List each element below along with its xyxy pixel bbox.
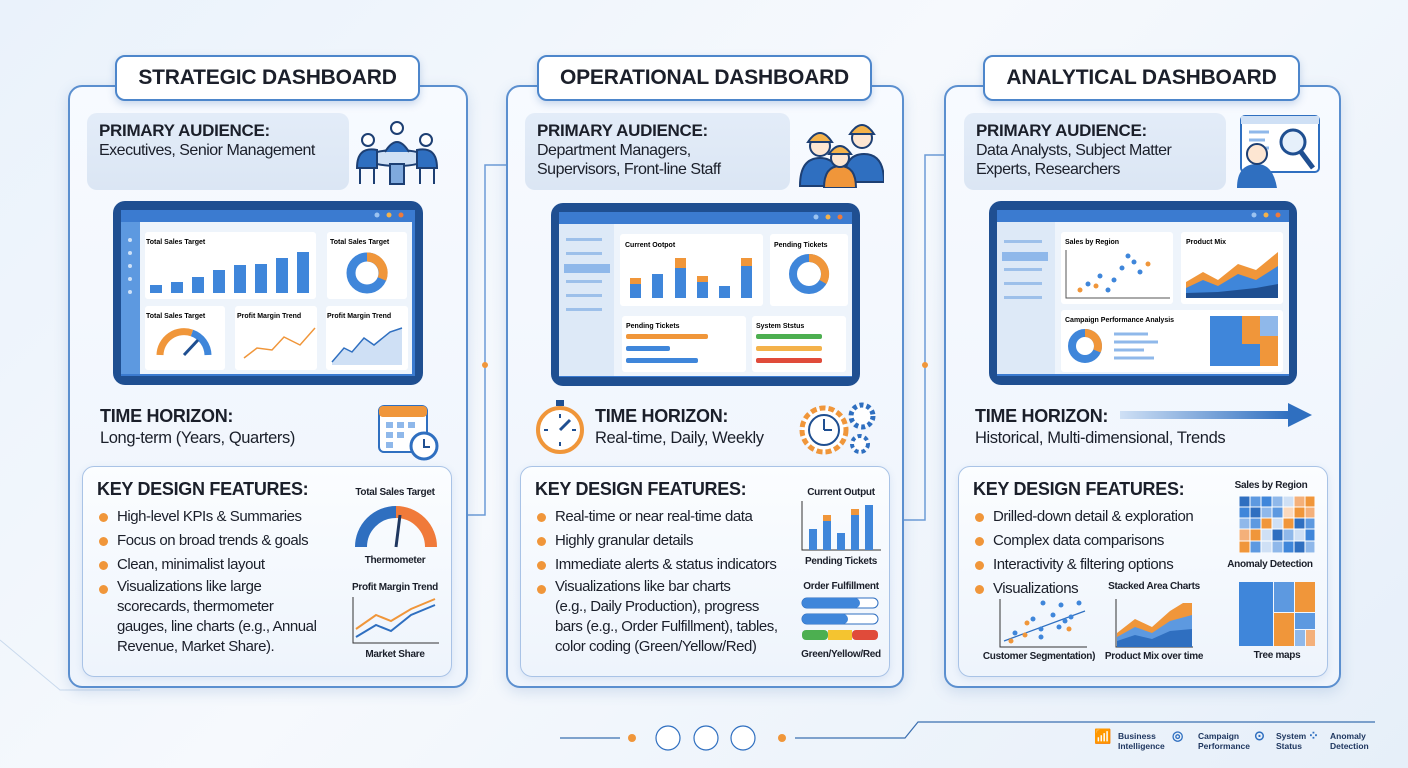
key features: operational: Highly granular details — [555, 532, 693, 549]
legend: Anomaly — [1330, 731, 1366, 741]
key features: operational: bars (e.g., Order Fulfillment), tables, — [555, 618, 778, 635]
screen: operational: Pending Tickets — [774, 242, 828, 249]
mini gauge: Total Sales Target — [355, 487, 435, 498]
audience: analytical — [964, 113, 1226, 190]
screen: strategic: Total Sales Target — [330, 239, 390, 246]
screen: analytical: Product Mix — [1186, 239, 1226, 246]
time horizon: strategic: Long-term (Years, Quarters) — [100, 429, 295, 447]
key features: strategic: Revenue, Market Share). — [117, 638, 274, 655]
audience: strategic: PRIMARY AUDIENCE: — [99, 121, 270, 140]
key features: strategic: gauges, line charts (e.g., Annual — [117, 618, 316, 635]
footer: icons and line — [560, 721, 1375, 751]
screen: strategic — [113, 201, 423, 385]
key features: strategic: High-level KPIs & Summaries — [117, 508, 302, 525]
time horizon: operational: Real-time, Daily, Weekly — [595, 429, 764, 447]
arrow: timeline — [1120, 403, 1312, 427]
time horizon: analytical: Historical, Multi-dimensional, Trends — [975, 429, 1225, 447]
time horizon: operational: TIME HORIZON: — [595, 406, 728, 426]
scatter — [1000, 599, 1087, 648]
panel: strategic — [68, 85, 468, 688]
legend: ⁘ — [1308, 728, 1319, 743]
key features: operational — [520, 466, 890, 677]
key features: strategic: Visualizations like large — [117, 578, 261, 595]
key features: analytical: Visualizations — [993, 580, 1078, 597]
screen: analytical: Campaign Performance Analysis — [1065, 317, 1174, 324]
key features: analytical: Product Mix over time — [1105, 651, 1203, 662]
legend: ◎ — [1172, 728, 1183, 743]
legend — [1094, 728, 1369, 751]
key features: analytical: Anomaly Detection — [1227, 559, 1313, 570]
key features: analytical: Complex data comparisons — [993, 532, 1164, 549]
key features: analytical: Stacked Area Charts — [1108, 581, 1200, 592]
audience: analytical: Experts, Researchers — [976, 161, 1120, 178]
panel: operational — [506, 85, 904, 688]
legend: System — [1276, 731, 1306, 741]
key features: operational: Visualizations like bar charts — [555, 578, 730, 595]
key features: strategic: Clean, minimalist layout — [117, 556, 265, 573]
tab: strategic dashboard — [115, 55, 420, 101]
key features: operational: color coding (Green/Yellow/Red) — [555, 638, 756, 655]
icon: workers — [799, 124, 884, 188]
key features: analytical: Sales by Region — [1235, 480, 1307, 491]
key features: strategic: Focus on broad trends & goals — [117, 532, 308, 549]
icon: stopwatch — [536, 400, 584, 454]
audience: analytical: Data Analysts, Subject Matter — [976, 142, 1171, 159]
tab: operational dashboard — [537, 55, 872, 101]
time horizon: operational — [595, 406, 764, 447]
screen: strategic: Profit Margin Trend — [327, 313, 391, 320]
key features: analytical: Drilled-down detail & exploration — [993, 508, 1193, 525]
screen: operational: Current Ootpot — [625, 242, 676, 249]
icon: meeting — [356, 121, 438, 185]
key features: strategic: Thermometer — [365, 555, 425, 566]
screen: strategic: Profit Margin Trend — [237, 313, 301, 320]
audience: operational: Department Managers, — [537, 142, 691, 159]
key features: strategic: Profit Margin Trend — [352, 582, 438, 593]
key features: analytical: KEY DESIGN FEATURES: — [973, 479, 1184, 499]
key features: analytical: Customer Segmentation) — [983, 651, 1095, 662]
key features: analytical — [958, 466, 1328, 677]
legend: 📶 — [1094, 728, 1111, 744]
time horizon: analytical — [975, 406, 1225, 447]
legend: Performance — [1198, 741, 1250, 751]
key features: strategic: Market Share — [365, 649, 425, 660]
icon: analyst — [1237, 115, 1320, 188]
icon: calendar — [378, 405, 438, 460]
key features: operational: (e.g., Daily Production), progress — [555, 598, 759, 615]
key features: operational: Immediate alerts & status indicators — [555, 556, 776, 573]
key features: operational: Green/Yellow/Red — [801, 649, 881, 660]
legend: Intelligence — [1118, 741, 1165, 751]
key features: strategic: KEY DESIGN FEATURES: — [97, 479, 308, 499]
legend: Detection — [1330, 741, 1369, 751]
time horizon: strategic — [100, 406, 295, 447]
screen: operational — [551, 203, 860, 386]
key features: analytical: Tree maps — [1254, 650, 1300, 661]
heatmap — [1239, 496, 1315, 553]
key features: analytical: Interactivity & filtering options — [993, 556, 1173, 573]
screen: strategic: Total Sales Target — [146, 313, 206, 320]
key features: operational: KEY DESIGN FEATURES: — [535, 479, 746, 499]
screen: operational: Pending Tickets — [626, 323, 680, 330]
tab: analytical dashboard — [983, 55, 1300, 101]
tab: analytical dashboard: ANALYTICAL DASHBOARD — [1006, 66, 1277, 89]
audience: strategic: Executives, Senior Management — [99, 142, 315, 159]
key features: operational: Current Output — [807, 487, 875, 498]
audience: operational — [525, 113, 790, 190]
screen: analytical: Sales by Region — [1065, 239, 1119, 246]
tab: operational dashboard: OPERATIONAL DASHBOARD — [560, 66, 849, 89]
panel: analytical — [944, 85, 1341, 688]
time horizon: analytical: TIME HORIZON: — [975, 406, 1108, 426]
key features: operational: Real-time or near real-time data — [555, 508, 752, 525]
treemap — [1239, 582, 1315, 646]
legend: Campaign — [1198, 731, 1239, 741]
legend: ⊙ — [1254, 728, 1265, 743]
icon: clock gears — [800, 402, 876, 454]
audience: strategic — [87, 113, 349, 190]
legend: Status — [1276, 741, 1302, 751]
key features: operational: Order Fulfillment — [803, 581, 879, 592]
tab: strategic dashboard: STRATEGIC DASHBOARD — [138, 66, 397, 89]
audience: analytical: PRIMARY AUDIENCE: — [976, 121, 1147, 140]
audience: operational: Supervisors, Front-line Staff — [537, 161, 721, 178]
screen: analytical — [989, 201, 1297, 385]
audience: operational: PRIMARY AUDIENCE: — [537, 121, 708, 140]
screen: operational: System Ststus — [756, 323, 804, 330]
key features: strategic: scorecards, thermometer — [117, 598, 273, 615]
screen: strategic: Total Sales Target — [146, 239, 206, 246]
key features: strategic — [82, 466, 452, 677]
time horizon: strategic: TIME HORIZON: — [100, 406, 233, 426]
legend: Business — [1118, 731, 1156, 741]
key features: operational: Pending Tickets — [805, 556, 877, 567]
